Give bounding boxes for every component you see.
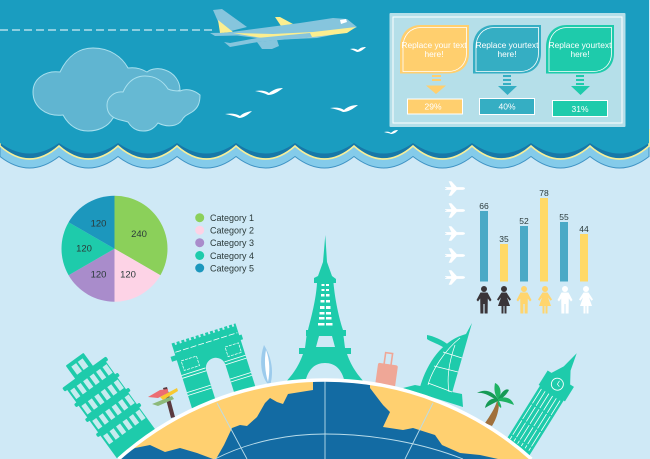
legend: Category 2	[210, 226, 254, 236]
callout: blue: here!	[497, 49, 517, 59]
icons: people	[476, 286, 593, 314]
callout: green	[546, 25, 614, 116]
clouds	[33, 48, 200, 131]
landmark: leaning tower	[53, 343, 161, 459]
landmark: Eiffel tower	[285, 235, 365, 383]
icon: airplane	[210, 9, 357, 49]
icon: palm tree	[477, 383, 514, 426]
legend: Category 4	[210, 251, 254, 261]
callout: green: 31%	[571, 104, 589, 114]
pie chart: 120	[91, 218, 106, 230]
legend	[195, 213, 254, 273]
callout: blue: 40%	[498, 102, 516, 112]
bar chart: 44	[579, 224, 589, 234]
bar chart	[479, 188, 589, 282]
callout: green: Replace yourtext	[549, 40, 612, 50]
bar chart: 55	[559, 212, 569, 222]
pie chart: 120	[91, 270, 106, 280]
bar chart: 66	[479, 201, 489, 211]
landmark: Burj Al Arab	[403, 323, 472, 407]
icon: surfboard	[261, 345, 272, 386]
pie chart: 120	[76, 244, 92, 254]
landmark: triumphal arch	[167, 324, 265, 430]
globe	[118, 378, 532, 459]
panel: callouts	[390, 13, 626, 127]
callout: yellow: 29%	[424, 102, 442, 112]
callout: yellow: here!	[424, 49, 444, 59]
callout: blue: Replace yourtext	[476, 40, 539, 50]
callout: green: here!	[570, 49, 590, 59]
bar chart: 78	[539, 188, 549, 198]
dashed flight path	[0, 29, 216, 31]
icon: signpost	[148, 387, 178, 418]
callout: yellow: Replace your text	[401, 40, 467, 50]
icon: suitcase	[375, 352, 400, 389]
pie chart: 120	[120, 270, 136, 280]
pie chart: 240	[131, 229, 147, 240]
bar chart: 52	[519, 216, 529, 226]
birds	[225, 47, 398, 134]
bar chart: 35	[499, 234, 509, 244]
callout: yellow	[400, 25, 469, 114]
legend: Category 1	[210, 213, 254, 223]
landmark: Big Ben	[503, 345, 590, 459]
callout: blue	[473, 25, 541, 114]
legend: Category 3	[210, 238, 254, 248]
wave header band	[0, 0, 649, 168]
icons: white planes	[445, 181, 465, 285]
legend: Category 5	[210, 263, 254, 273]
pie chart	[61, 196, 168, 302]
